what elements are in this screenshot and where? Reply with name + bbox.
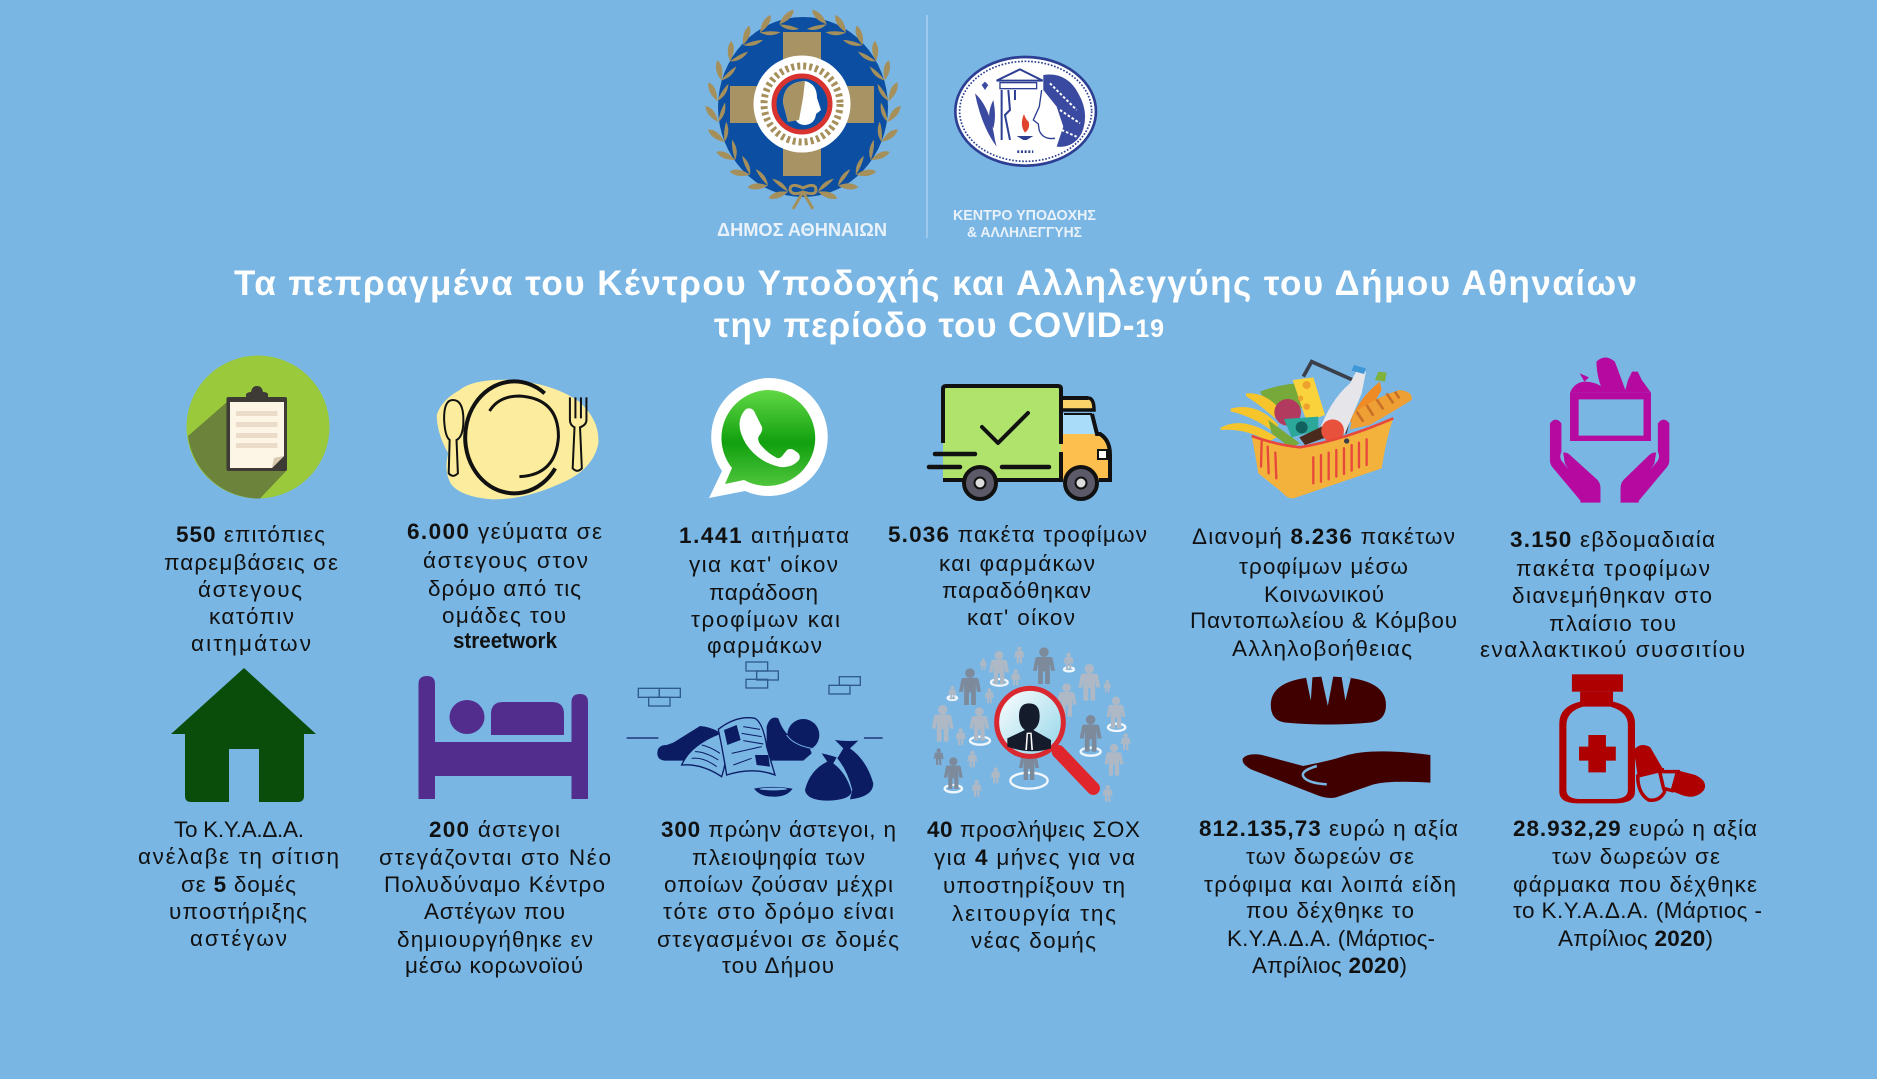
text block: πλαίσιο του bbox=[1549, 611, 1676, 636]
panel: food donations bbox=[1199, 676, 1458, 978]
text block: άστεγους στον bbox=[423, 548, 588, 573]
text block: εναλλακτικού συσσιτίου bbox=[1480, 637, 1745, 662]
text block: των δωρεών σε bbox=[1246, 844, 1414, 869]
text block: τροφίμων και bbox=[691, 607, 840, 632]
text block bbox=[1513, 816, 1762, 951]
text block: 812.135,73 ευρώ η αξία bbox=[1199, 816, 1458, 841]
text block: δρόμο από τις bbox=[428, 576, 581, 601]
text block: στεγασμένοι σε δομές bbox=[657, 927, 899, 952]
title: την περίοδο του COVID-19 bbox=[714, 306, 1164, 345]
panel: 300 former homeless bbox=[627, 662, 899, 978]
panel: 3150 weekly packages bbox=[1480, 357, 1745, 662]
text block: Απρίλιος 2020) bbox=[1558, 926, 1713, 951]
text block: τροφίμων μέσω bbox=[1239, 554, 1408, 579]
text block: υποστηρίξουν τη bbox=[943, 873, 1125, 898]
text block: φάρμακα που δέχθηκε bbox=[1513, 872, 1757, 897]
icon: homeless person with newspapers bbox=[627, 662, 883, 801]
text block bbox=[1480, 527, 1745, 662]
panel: 6000 meals bbox=[407, 380, 602, 653]
icon: shopping basket bbox=[1221, 362, 1412, 498]
text block bbox=[1199, 816, 1458, 978]
text block: streetwork bbox=[453, 628, 557, 653]
text block: για 4 μήνες για να bbox=[934, 845, 1135, 870]
text block: Παντοπωλείου & Κόμβου bbox=[1190, 608, 1457, 633]
text block bbox=[927, 817, 1140, 953]
logo: Reception and Solidarity Centre: & ΑΛΛΗΛΕΓΓΥΗΣ bbox=[967, 225, 1082, 241]
text block: δημιουργήθηκε εν bbox=[397, 927, 593, 952]
text block: άστεγους bbox=[198, 577, 302, 602]
text block bbox=[888, 522, 1147, 630]
text block: οποίων ζούσαν μέχρι bbox=[664, 872, 893, 897]
panel: medicine donations bbox=[1513, 674, 1762, 951]
text block: κατόπιν bbox=[209, 604, 294, 629]
text block: Απρίλιος 2020) bbox=[1252, 953, 1407, 978]
text block: Κοινωνικού bbox=[1264, 582, 1384, 607]
text block: 300 πρώην άστεγοι, η bbox=[661, 817, 896, 842]
text block: πλειοψηφία των bbox=[692, 845, 865, 870]
text block: αστέγων bbox=[190, 926, 287, 951]
text block: του Δήμου bbox=[722, 953, 834, 978]
text block bbox=[657, 817, 899, 978]
text block: ομάδες του bbox=[442, 603, 566, 628]
logo: Reception and Solidarity Centre: ΚΕΝΤΡΟ ΥΠΟΔΟΧΗΣ bbox=[953, 208, 1096, 224]
text block: υποστήριξης bbox=[169, 899, 307, 924]
icon: magnifier over people bbox=[932, 647, 1131, 802]
text block: Κ.Υ.Α.Δ.Α. (Μάρτιος- bbox=[1227, 926, 1435, 951]
text block: 200 άστεγοι bbox=[429, 817, 560, 842]
text block: τρόφιμα και λοιπά είδη bbox=[1204, 872, 1456, 897]
text block: αιτημάτων bbox=[191, 631, 311, 656]
text block: το Κ.Υ.Α.Δ.Α. (Μάρτιος - bbox=[1513, 898, 1762, 923]
text block: φαρμάκων bbox=[707, 633, 822, 658]
icon: clipboard bbox=[186, 356, 330, 499]
text block: 1.441 αιτήματα bbox=[679, 523, 849, 548]
text block bbox=[379, 817, 611, 978]
icon: bed bbox=[418, 676, 588, 799]
text block: Το Κ.Υ.Α.Δ.Α. bbox=[174, 817, 304, 842]
text block: μέσω κορωνοϊού bbox=[405, 953, 583, 978]
logo: Municipality of Athens: ΔΗΜΟΣ ΑΘΗΝΑΙΩΝ bbox=[717, 219, 887, 240]
text block: ανέλαβε τη σίτιση bbox=[138, 844, 339, 869]
logo: Reception and Solidarity Centre bbox=[953, 57, 1096, 241]
text block bbox=[679, 523, 849, 658]
text block: που δέχθηκε το bbox=[1246, 898, 1414, 923]
icon: delivery truck bbox=[929, 386, 1110, 499]
divider bbox=[926, 15, 928, 238]
icon: WhatsApp bbox=[709, 378, 828, 498]
text block: Διανομή 8.236 πακέτων bbox=[1192, 524, 1455, 549]
panel: 1441 requests bbox=[679, 378, 849, 658]
icon: house bbox=[171, 668, 316, 802]
text block: για κατ' οίκον bbox=[689, 552, 838, 577]
text block: και φαρμάκων bbox=[939, 551, 1095, 576]
text block: 28.932,29 ευρώ η αξία bbox=[1513, 816, 1757, 841]
text block: 550 επιτόπιες bbox=[176, 522, 325, 547]
panel: 8236 packages bbox=[1190, 362, 1457, 661]
text block: στεγάζονται στο Νέο bbox=[379, 845, 611, 870]
title: Τα πεπραγμένα του Κέντρου Υποδοχής και Αλληλεγγύης του Δήμου Αθηναίων bbox=[234, 264, 1637, 303]
text block: 3.150 εβδομαδιαία bbox=[1510, 527, 1715, 552]
logo: Municipality of Athens bbox=[705, 10, 901, 240]
text block: 40 προσλήψεις ΣΟΧ bbox=[927, 817, 1140, 842]
panel: 550 interventions bbox=[164, 356, 338, 656]
text block: Πολυδύναμο Κέντρο bbox=[384, 872, 605, 897]
text block: παραδόθηκαν bbox=[942, 578, 1091, 603]
icon: medicine bottle and capsules bbox=[1559, 674, 1705, 803]
text block: Αλληλοβοήθειας bbox=[1232, 636, 1412, 661]
text block: πακέτα τροφίμων bbox=[1516, 556, 1710, 581]
text block: 6.000 γεύματα σε bbox=[407, 519, 602, 544]
title bbox=[234, 264, 1637, 345]
icon: bread on a hand bbox=[1243, 676, 1430, 798]
text block: διανεμήθηκαν στο bbox=[1512, 583, 1712, 608]
text block: Αστέγων που bbox=[424, 899, 565, 924]
text block: κατ' οίκον bbox=[967, 605, 1075, 630]
text block bbox=[138, 817, 339, 951]
text block: των δωρεών σε bbox=[1552, 844, 1720, 869]
text block: λειτουργία της bbox=[952, 901, 1116, 926]
text block: νέας δομής bbox=[971, 928, 1096, 953]
text block bbox=[407, 519, 602, 653]
text block: παράδοση bbox=[709, 580, 818, 605]
text block: παρεμβάσεις σε bbox=[164, 550, 338, 575]
text block: τότε στο δρόμο είναι bbox=[663, 899, 894, 924]
icon: hands holding groceries bbox=[1550, 357, 1669, 503]
text block: 5.036 πακέτα τροφίμων bbox=[888, 522, 1147, 547]
text block bbox=[164, 522, 338, 656]
text block bbox=[1190, 524, 1457, 661]
text block: σε 5 δομές bbox=[181, 872, 296, 897]
icon: plate with spoon and fork bbox=[437, 380, 598, 499]
panel: 5 shelters bbox=[138, 668, 339, 951]
panel: 200 homeless housed bbox=[379, 676, 611, 978]
panel: 40 hires bbox=[927, 647, 1140, 953]
panel: 5036 packages bbox=[888, 386, 1147, 630]
